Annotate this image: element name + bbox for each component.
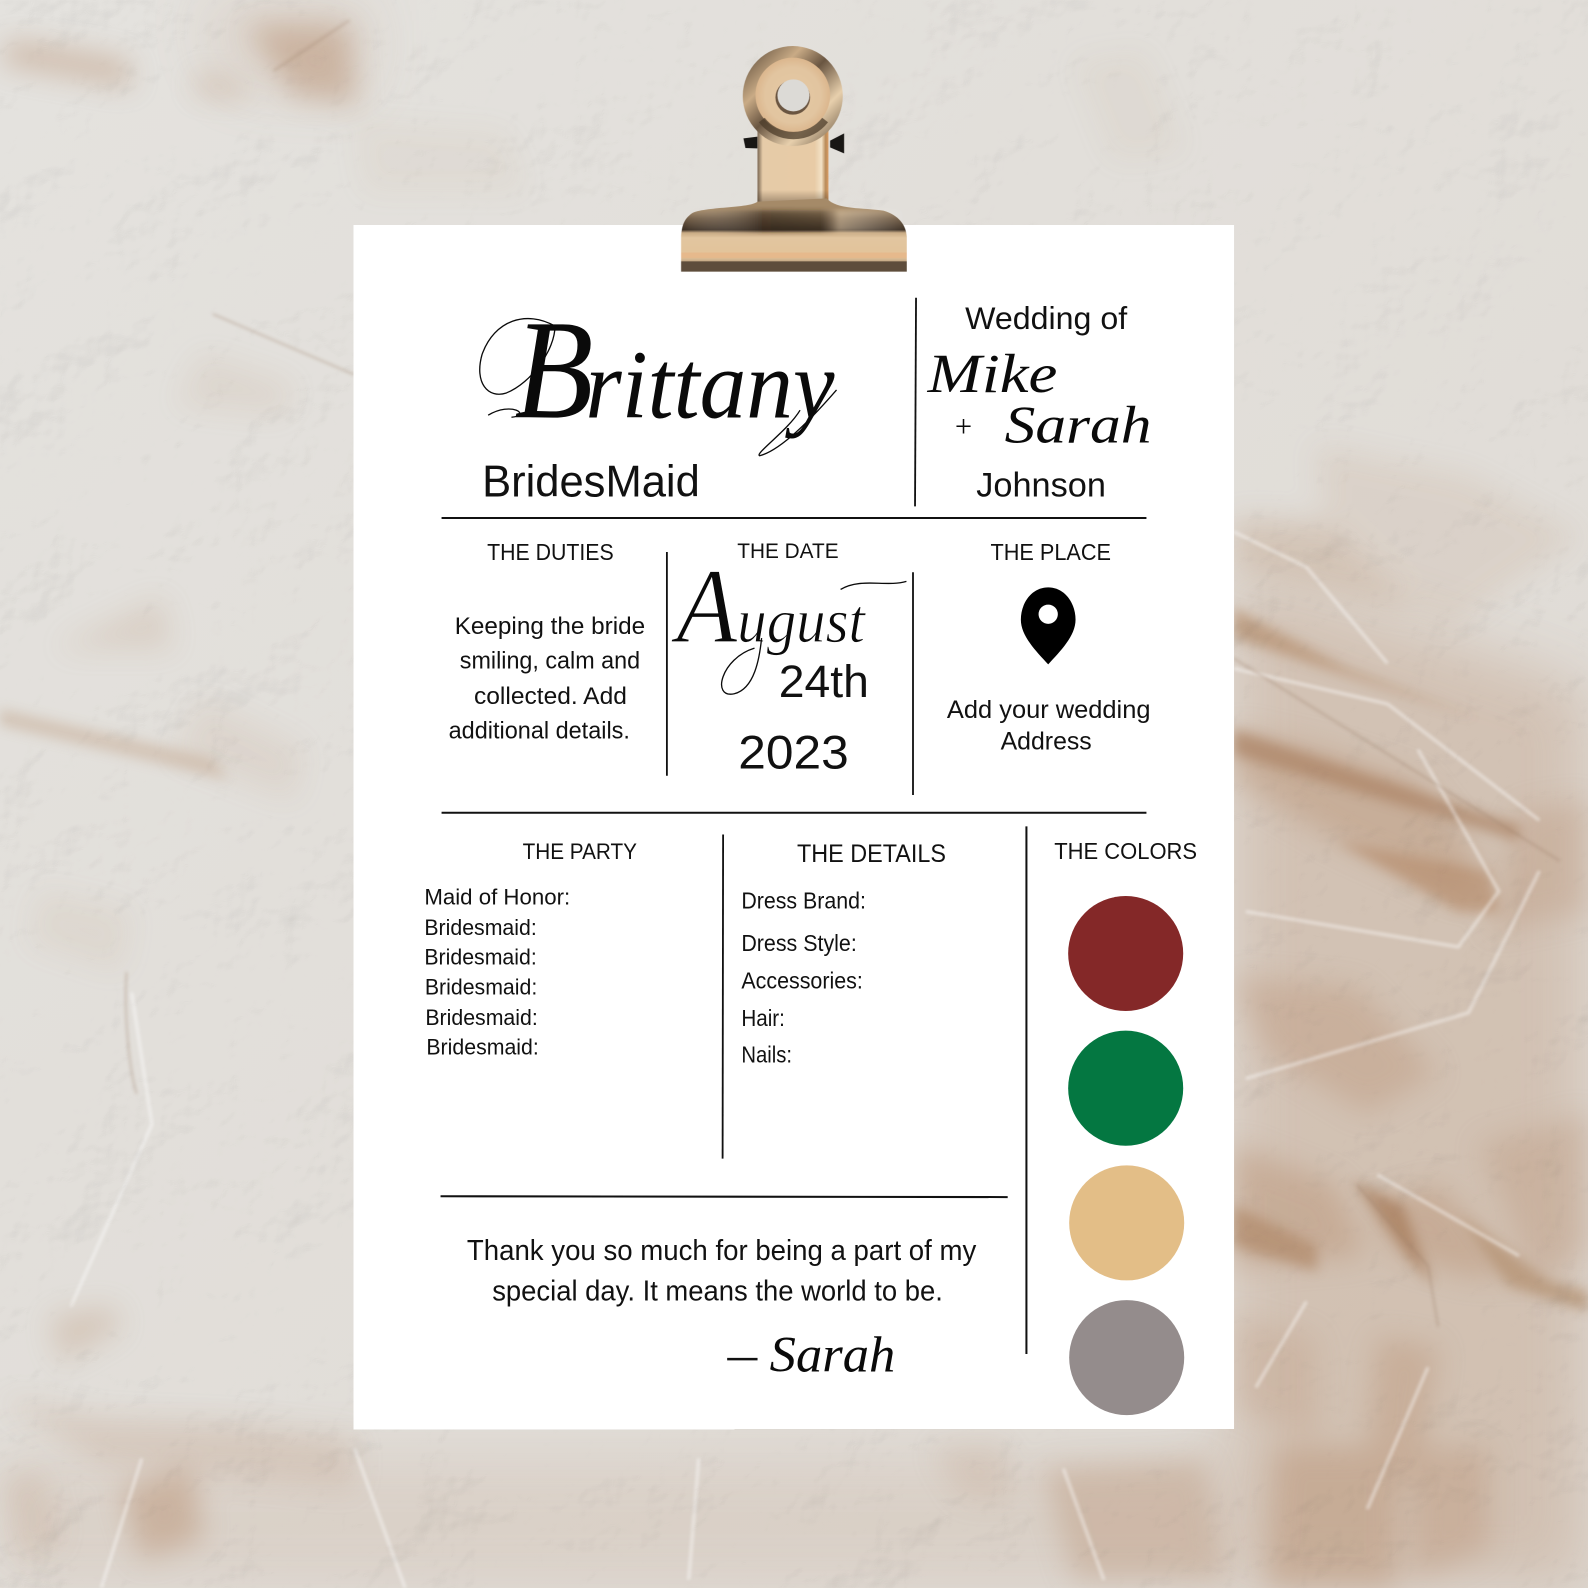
icon: map pin [1021,587,1076,664]
name: Sarah: Sarah [1005,397,1152,455]
panel: the date [671,539,906,780]
heading: THE DUTIES [487,539,614,565]
duties text [449,613,645,744]
month: August: ugust [737,586,866,656]
clip black side tabs [743,133,844,153]
thank you message [467,1235,977,1307]
label: Wedding of: Wedding of [965,301,1127,336]
divider details colors [1025,826,1027,1354]
signature: Sarah [770,1326,895,1382]
duties text: Keeping the bride [455,613,645,640]
name: Brittany: B [514,291,593,448]
heading: THE PLACE [990,539,1111,565]
thank you message: Thank you so much for being a part of my [467,1235,977,1267]
duties text: smiling, calm and [460,647,640,674]
panel: the details [741,840,946,1067]
party list: Maid of Honor: [424,884,570,909]
swatch: green [1068,1031,1183,1146]
divider header vertical [915,298,916,506]
flourish on B [480,319,555,417]
divider top [442,517,1146,519]
divider middle [442,812,1146,814]
swatch: grey [1069,1300,1184,1415]
divider lower [441,1195,1008,1198]
heading: THE DATE [737,539,839,563]
divider date place [912,572,914,795]
divider duties date [666,552,668,776]
white note sheet [353,225,1234,1429]
clip base plate [681,198,907,272]
clip neck [757,120,828,217]
details list: Nails: [741,1041,792,1067]
panel: the colors [1054,838,1197,1415]
name: Mike: Mike [926,343,1057,404]
heading: THE COLORS [1054,838,1197,864]
panel: the place [947,539,1150,755]
year: 2023 [738,727,849,780]
heading: THE PARTY [523,839,637,864]
flourish on August [722,581,906,694]
details list: Dress Brand: [741,887,866,913]
day: 24th [779,656,869,707]
swatch: sand [1069,1165,1184,1280]
party list [424,884,570,1059]
plus sign: + [953,409,974,443]
party list: Bridesmaid: [425,975,537,1000]
icon: gold bulldog clip [681,46,907,272]
panel: the party [424,839,637,1059]
duties text: additional details. [449,717,630,744]
swatch: burgundy [1068,896,1183,1011]
flourish on y [759,390,837,456]
month: August: A [671,547,738,666]
name remainder: rittany [585,331,835,439]
duties text: collected. Add [474,683,627,710]
heading: THE DETAILS [797,840,946,868]
panel: the duties [449,539,645,744]
details list: Dress Style: [741,930,857,956]
party list: Bridesmaid: [424,945,537,970]
party list: Bridesmaid: [424,915,537,940]
surname: Johnson: Johnson [976,466,1106,504]
role: BridesMaid: BridesMaid [482,457,700,506]
thank you message: special day. It means the world to be. [492,1275,943,1307]
party list: Bridesmaid: [426,1034,539,1059]
address [947,696,1150,755]
address: Add your wedding [947,696,1150,724]
clip ring [743,46,843,146]
details list [741,887,866,1067]
address: Address [1001,727,1092,755]
details list: Accessories: [741,967,863,993]
wedding of block [926,301,1152,504]
details list: Hair: [741,1005,785,1031]
divider party details [722,835,724,1159]
month: August [671,547,866,666]
party list: Bridesmaid: [425,1005,538,1030]
header: Brittany name block [480,291,837,506]
